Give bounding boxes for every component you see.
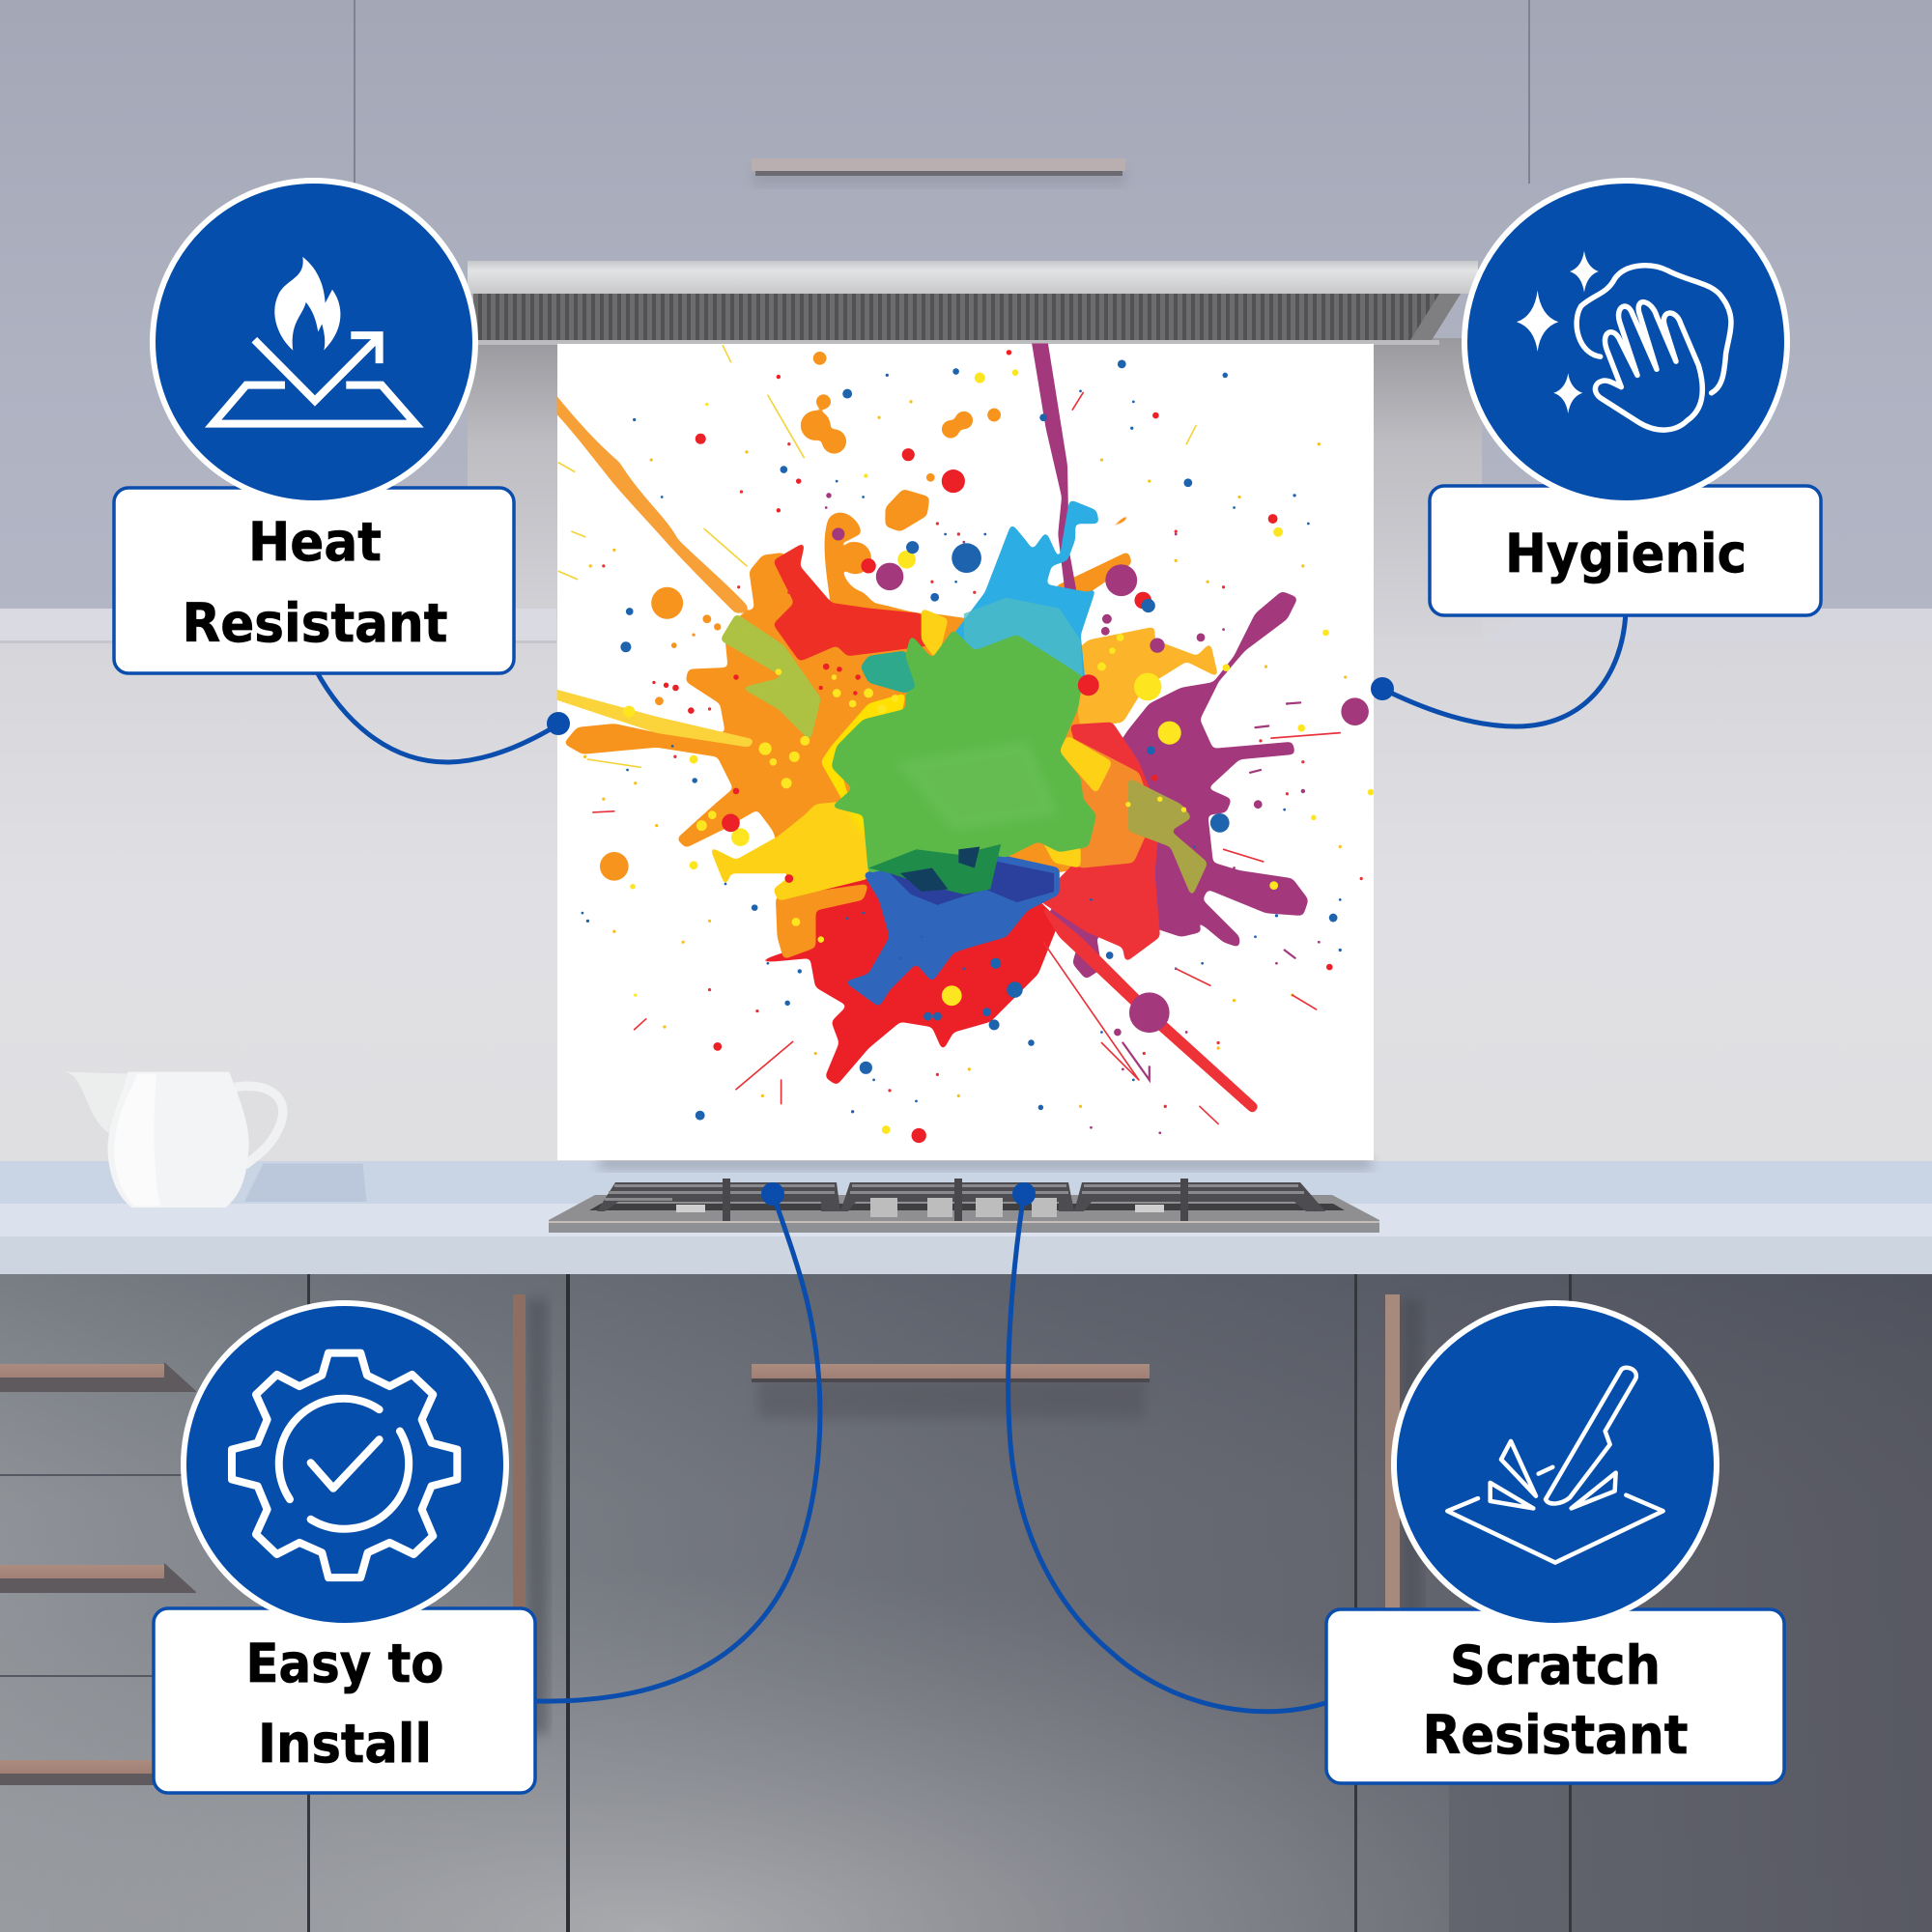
icon: knife scratching surface [1447, 1368, 1663, 1563]
label text [1422, 1634, 1689, 1766]
red streak [1038, 902, 1259, 1114]
orange-yellow patch with red spots [832, 674, 898, 714]
label text [245, 1633, 444, 1775]
connector dot [1371, 677, 1394, 700]
label text: Heat [248, 511, 382, 573]
connector dot [547, 712, 570, 735]
purple drip [1029, 323, 1079, 609]
icon: sparkles and hand wiping [1517, 251, 1731, 430]
cooktop [549, 1179, 1379, 1233]
upper cabinets [0, 0, 1932, 618]
dark blue splash [844, 847, 1060, 1007]
label text: Scratch [1450, 1634, 1661, 1696]
connector: heat resistant [315, 668, 558, 762]
label text: Resistant [182, 592, 448, 654]
orange lower patch [776, 884, 868, 959]
orange splash [540, 352, 1133, 899]
centre drawer handle [752, 1364, 1150, 1418]
label box [1326, 1609, 1784, 1783]
range hood [468, 261, 1478, 345]
connector: hygienic [1382, 611, 1626, 726]
callout: heat resistant [114, 181, 570, 762]
green shading [868, 741, 1060, 895]
connector dot [761, 1182, 784, 1206]
red right splash [1038, 723, 1160, 962]
callout: easy to install [154, 1182, 820, 1793]
countertop [0, 1204, 1932, 1274]
drawer handles [0, 1362, 196, 1785]
badge circle [1464, 181, 1787, 503]
connector dot [1012, 1182, 1036, 1206]
tiled wall [0, 609, 1932, 1174]
red lower splash [752, 873, 1060, 1085]
connector: easy to install [537, 1194, 820, 1701]
green splash [832, 630, 1096, 873]
callout: hygienic [1371, 181, 1821, 726]
label box [154, 1608, 535, 1793]
orange centre-right [1073, 738, 1146, 867]
yellow drops [623, 369, 1374, 1134]
badge circle [153, 181, 475, 503]
shaded wall under hood [468, 338, 1482, 638]
light blue splash [955, 500, 1098, 677]
callout: scratch resistant [1009, 1182, 1784, 1783]
purple splash [1029, 323, 1308, 980]
base cabinets [0, 1274, 1932, 1932]
fine speckles [582, 391, 1361, 1133]
backsplash ledge [0, 1161, 1932, 1205]
label box [1430, 486, 1821, 615]
badge circle [184, 1303, 506, 1626]
paint splatter artwork [540, 323, 1374, 1143]
splatter streaks [558, 346, 1340, 1123]
label text: Easy to [245, 1633, 444, 1694]
label text: Install [258, 1713, 432, 1775]
icon: gear with check mark [232, 1353, 457, 1577]
panel shadow [599, 1156, 1372, 1170]
olive overlaps [721, 613, 1208, 897]
blue drops [586, 359, 1342, 1121]
teal patch [861, 651, 916, 693]
yellow-orange splash [1070, 627, 1218, 727]
badge circle [1394, 1303, 1717, 1626]
red upper splash [773, 542, 929, 662]
label box [114, 488, 514, 673]
cabinet handle [752, 158, 1125, 185]
label text [182, 511, 448, 654]
red drops [652, 350, 1333, 1143]
vertical door handles [513, 1294, 1422, 1734]
purple drops [826, 493, 1369, 1036]
label text: Resistant [1422, 1704, 1689, 1766]
label text: Hygienic [1505, 523, 1747, 584]
connector: scratch resistant [1009, 1194, 1325, 1712]
teapot [65, 1072, 366, 1208]
icon: flame over surface with reflect arrow [213, 257, 415, 424]
yellow left splash [540, 609, 1112, 901]
splash back panel [557, 344, 1374, 1160]
